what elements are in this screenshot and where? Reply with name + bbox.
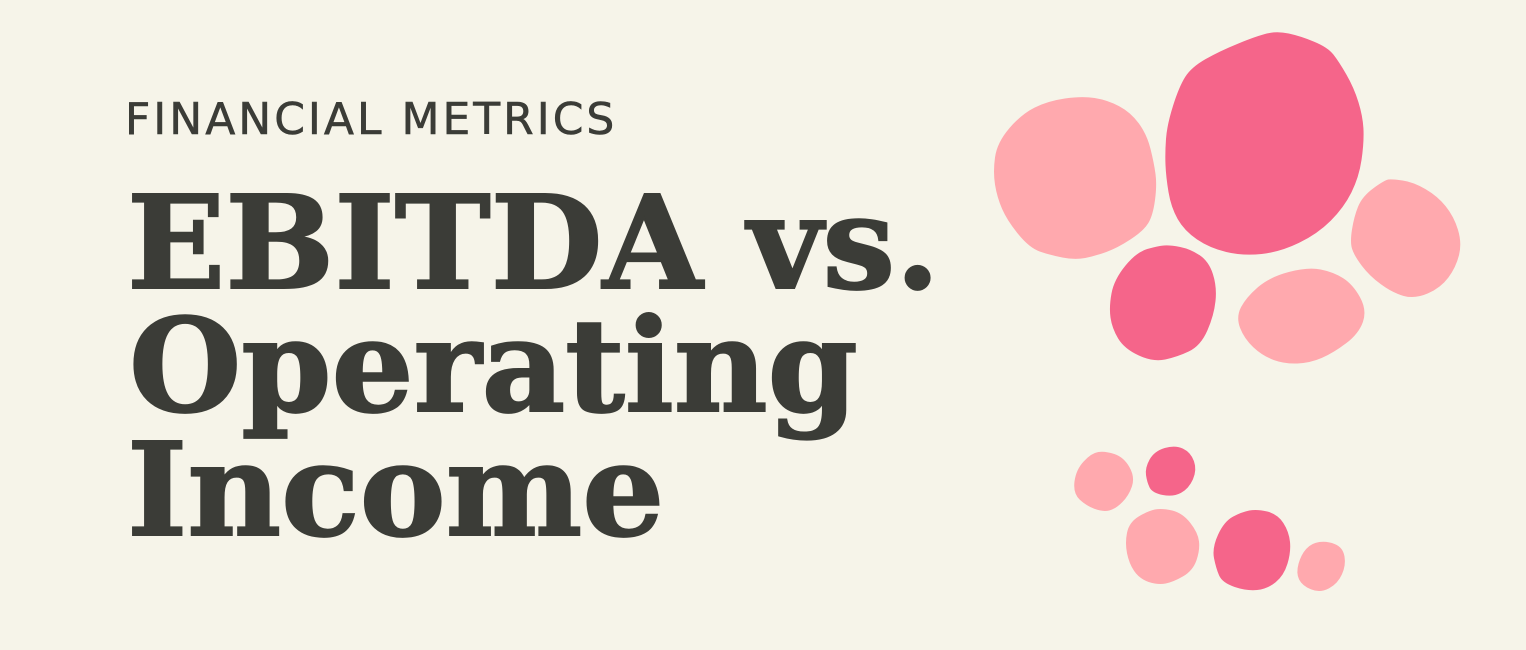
blob: small dark pink 2 [1214,511,1289,589]
title: Operating [129,291,858,442]
eyebrow heading: FINANCIAL METRICS [125,94,617,145]
blob: medium light pink right [1352,180,1459,296]
blob: large dark pink top [1166,33,1363,254]
blob: large light pink left [995,98,1155,258]
title: EBITDA vs. [127,168,940,319]
blob: small light pink 3 [1298,543,1344,590]
blob: medium light pink bottom [1239,270,1363,363]
blob: small light pink 2 [1127,510,1198,583]
blob: small light pink 1 [1075,453,1132,510]
title [127,168,940,566]
blob: small dark pink 1 [1147,448,1194,495]
title: Income [127,415,664,566]
blob: medium dark pink center [1111,246,1215,359]
